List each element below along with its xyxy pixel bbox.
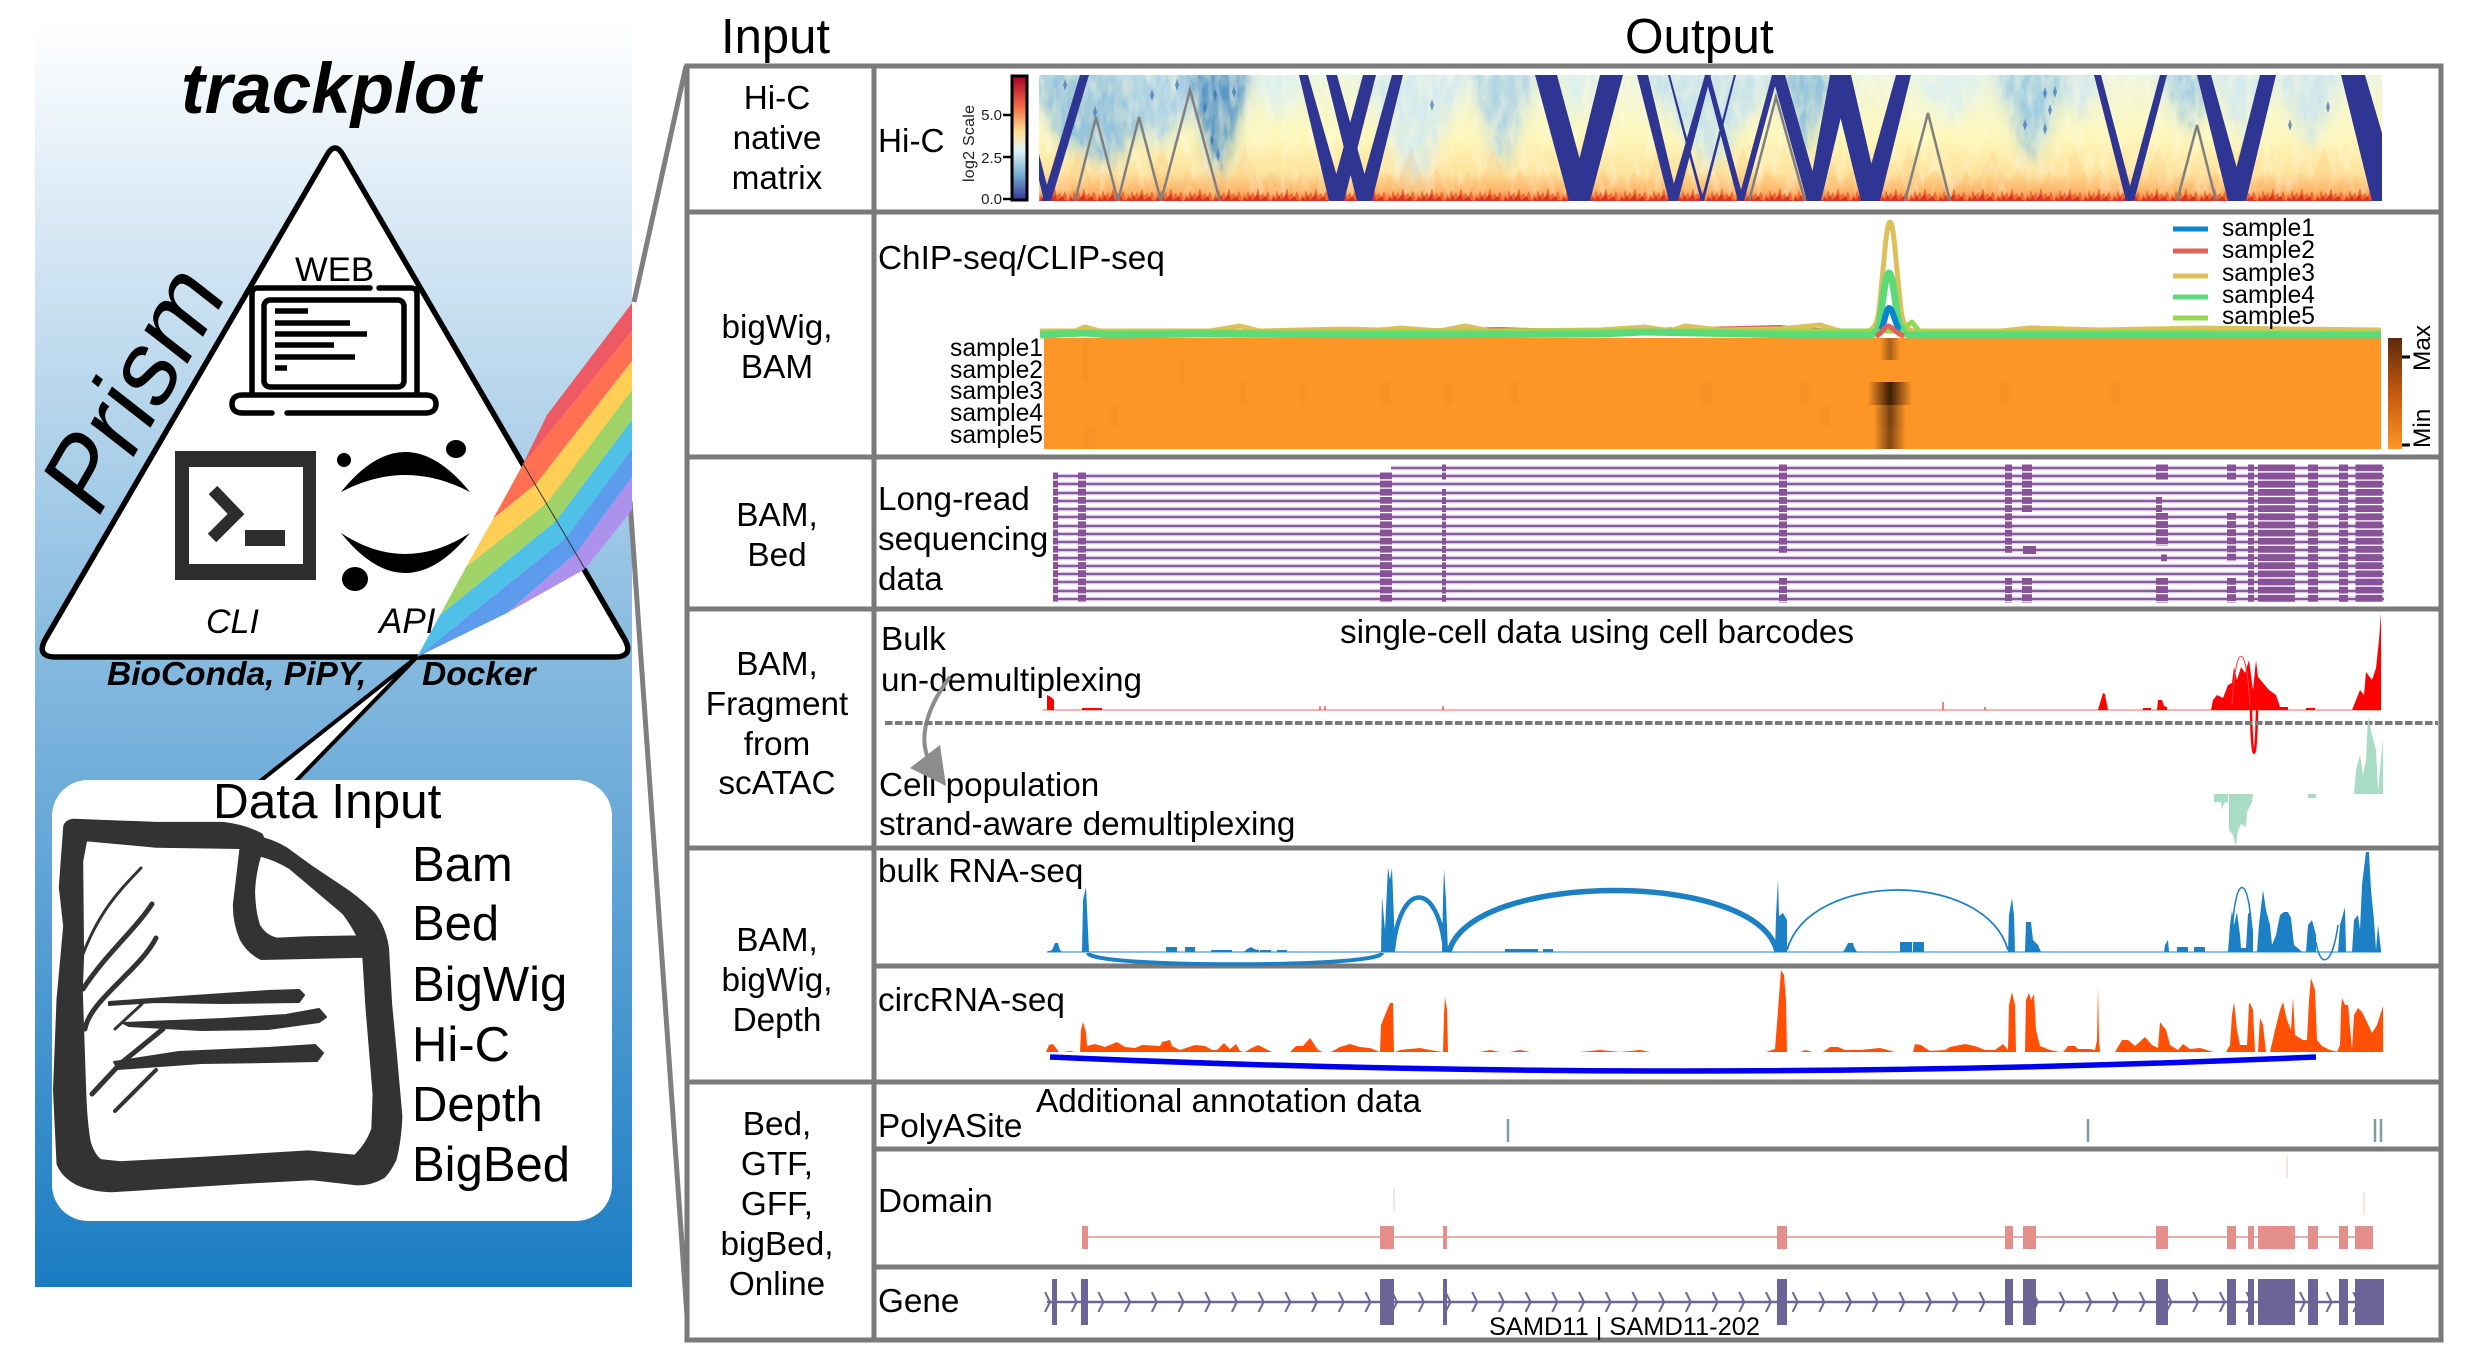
input column labels: scATAC: [718, 765, 836, 802]
sample labels: [950, 335, 1043, 449]
colorbar: log2 scale: 5.0: [981, 107, 1002, 124]
input column labels: bigWig,: [721, 962, 833, 999]
rainbow light beam: [417, 303, 632, 657]
label: long-read sequencing data: data: [878, 561, 943, 598]
legend: sample1: [2222, 215, 2315, 242]
colorbar: min max: Min: [2409, 409, 2436, 448]
input column labels: from: [744, 726, 810, 763]
input column labels: BAM,: [736, 497, 818, 534]
coverage: strand-aware green: [2214, 717, 2383, 846]
label: bulk RNA-seq: bulk RNA-seq: [878, 853, 1083, 890]
label: bulk un-demultiplexing: un-demultiplexing: [881, 662, 1142, 699]
input column labels: Depth: [733, 1002, 821, 1039]
label: bulk un-demultiplexing: Bulk: [881, 621, 946, 658]
heading: Input: Input: [721, 10, 830, 64]
panel: Hi-C track: [878, 70, 2382, 208]
icon: laptop: [232, 288, 436, 413]
heading: Additional annotation data: Additional annotation data: [1036, 1083, 1422, 1120]
panel: single-cell track: [879, 613, 2438, 846]
colorbar: log2 scale: log2 Scale: [961, 105, 978, 182]
reads: transcripts: [1055, 464, 2384, 603]
input column labels: Bed,: [743, 1106, 811, 1143]
icon: command line terminal: [175, 451, 316, 580]
input column labels: matrix: [732, 160, 823, 197]
colorbar: log2 scale: [961, 76, 1027, 208]
list: input formats: Depth: [412, 1078, 543, 1132]
label: install channels: BioConda, PiPY,: [107, 656, 366, 693]
label: Docker: Docker: [422, 656, 538, 693]
colorbar: min max: [2388, 325, 2436, 449]
track: gene model: [1044, 1279, 2384, 1325]
list: input formats: BigBed: [412, 1138, 570, 1192]
funnel lines linking prism to table: [630, 66, 687, 1316]
sites: PolyASite ticks: [1508, 1119, 2381, 1142]
legend: sample4: [2222, 282, 2315, 309]
label: CLI: CLI: [206, 603, 259, 641]
label: cell population: [879, 767, 1295, 843]
input column labels: native: [733, 120, 821, 157]
coverage: bulk red: [1042, 613, 2381, 753]
panel: bulk RNA-seq track: [878, 852, 2381, 964]
arrow: bulk to cell population: [910, 677, 950, 786]
label: long-read sequencing data: Long-read: [878, 481, 1030, 518]
label: gene name: SAMD11 | SAMD11-202: [1489, 1313, 1760, 1341]
label: Hi-C: Hi-C: [878, 123, 945, 160]
loops: grey triangles: [1075, 90, 2216, 201]
panel: annotation tracks: [878, 1083, 2384, 1341]
list: input formats: BigWig: [412, 958, 567, 1012]
arc: circular junction: [1050, 1057, 2316, 1071]
colorbar: log2 scale: 0.0: [981, 191, 1002, 208]
icon: API logo: [337, 440, 470, 591]
label: cell population: strand-aware demultiplexing: [879, 806, 1295, 843]
input column labels: BAM,: [736, 646, 818, 683]
input column labels: BAM,: [736, 922, 818, 959]
label: cell population: Cell population: [879, 767, 1099, 804]
input column labels: bigWig,: [721, 309, 833, 346]
input column labels: GTF,: [741, 1146, 813, 1183]
sample labels: sample4: [950, 400, 1043, 427]
label: long-read sequencing data: [878, 481, 1048, 598]
list: input formats: [412, 838, 570, 1192]
heading: Prism: Prism: [22, 239, 244, 536]
label: Domain: Domain: [878, 1183, 993, 1220]
label: PolyASite: PolyASite: [878, 1108, 1022, 1145]
input column labels: Online: [729, 1266, 825, 1303]
label: circRNA-seq: circRNA-seq: [878, 982, 1065, 1019]
title: trackplot: trackplot: [181, 50, 484, 129]
prism triangle: [42, 148, 628, 657]
heatmap: samples: [1044, 338, 2381, 449]
colorbar: log2 scale: 2.5: [981, 150, 1002, 167]
list: input formats: Bed: [412, 897, 499, 951]
sample labels: sample3: [950, 378, 1043, 405]
left panel background: [35, 20, 632, 1287]
heading: Output: Output: [1625, 9, 1774, 64]
sample labels: sample1: [950, 335, 1043, 362]
label: Gene: Gene: [878, 1283, 959, 1320]
heading: Data Input: Data Input: [213, 774, 442, 829]
label: WEB: WEB: [295, 251, 374, 289]
input column labels: BAM: [741, 349, 813, 386]
label: API: API: [377, 602, 436, 641]
label: ChIP-seq/CLIP-seq: ChIP-seq/CLIP-seq: [878, 240, 1165, 277]
input column labels: Fragment: [706, 686, 848, 723]
input column labels: GFF,: [741, 1186, 813, 1223]
icon: hand-drawn file: [54, 820, 401, 1191]
label: bulk un-demultiplexing: [881, 621, 1142, 699]
input column labels: bigBed,: [721, 1226, 833, 1263]
beam from prism to data input: [259, 657, 417, 782]
legend: [2173, 215, 2315, 330]
input column labels: Hi-C: [744, 80, 810, 117]
list: input formats: Bam: [412, 838, 513, 892]
panel: circRNA-seq track: [878, 970, 2383, 1071]
list: input formats: Hi-C: [412, 1018, 510, 1072]
heading: single-cell data using cell barcodes: single-cell data using cell barcodes: [1340, 614, 1854, 651]
heatmap: contact matrix: [1030, 70, 2382, 201]
sample labels: sample5: [950, 422, 1043, 449]
label: long-read sequencing data: sequencing: [878, 521, 1048, 558]
line chart: coverage per sample: [1040, 222, 2381, 336]
table grid: [687, 66, 2441, 1340]
sample labels: sample2: [950, 357, 1043, 384]
divider: dashed: [885, 721, 2438, 725]
legend: sample5: [2222, 303, 2315, 330]
coverage and splice arcs: [1047, 852, 2381, 964]
colorbar: min max: Max: [2409, 325, 2436, 371]
legend: sample2: [2222, 237, 2315, 264]
input column labels: Bed: [747, 537, 807, 574]
coverage: [1046, 970, 2383, 1052]
boundaries: blue domain bands: [1039, 75, 2382, 201]
panel: ChIP-seq / CLIP-seq track: [878, 215, 2436, 449]
panel: data input: [52, 774, 612, 1221]
track: domain: [1082, 1155, 2373, 1249]
input column labels: [706, 80, 848, 1303]
panel: long-read sequencing track: [878, 464, 2384, 603]
legend: sample3: [2222, 260, 2315, 287]
